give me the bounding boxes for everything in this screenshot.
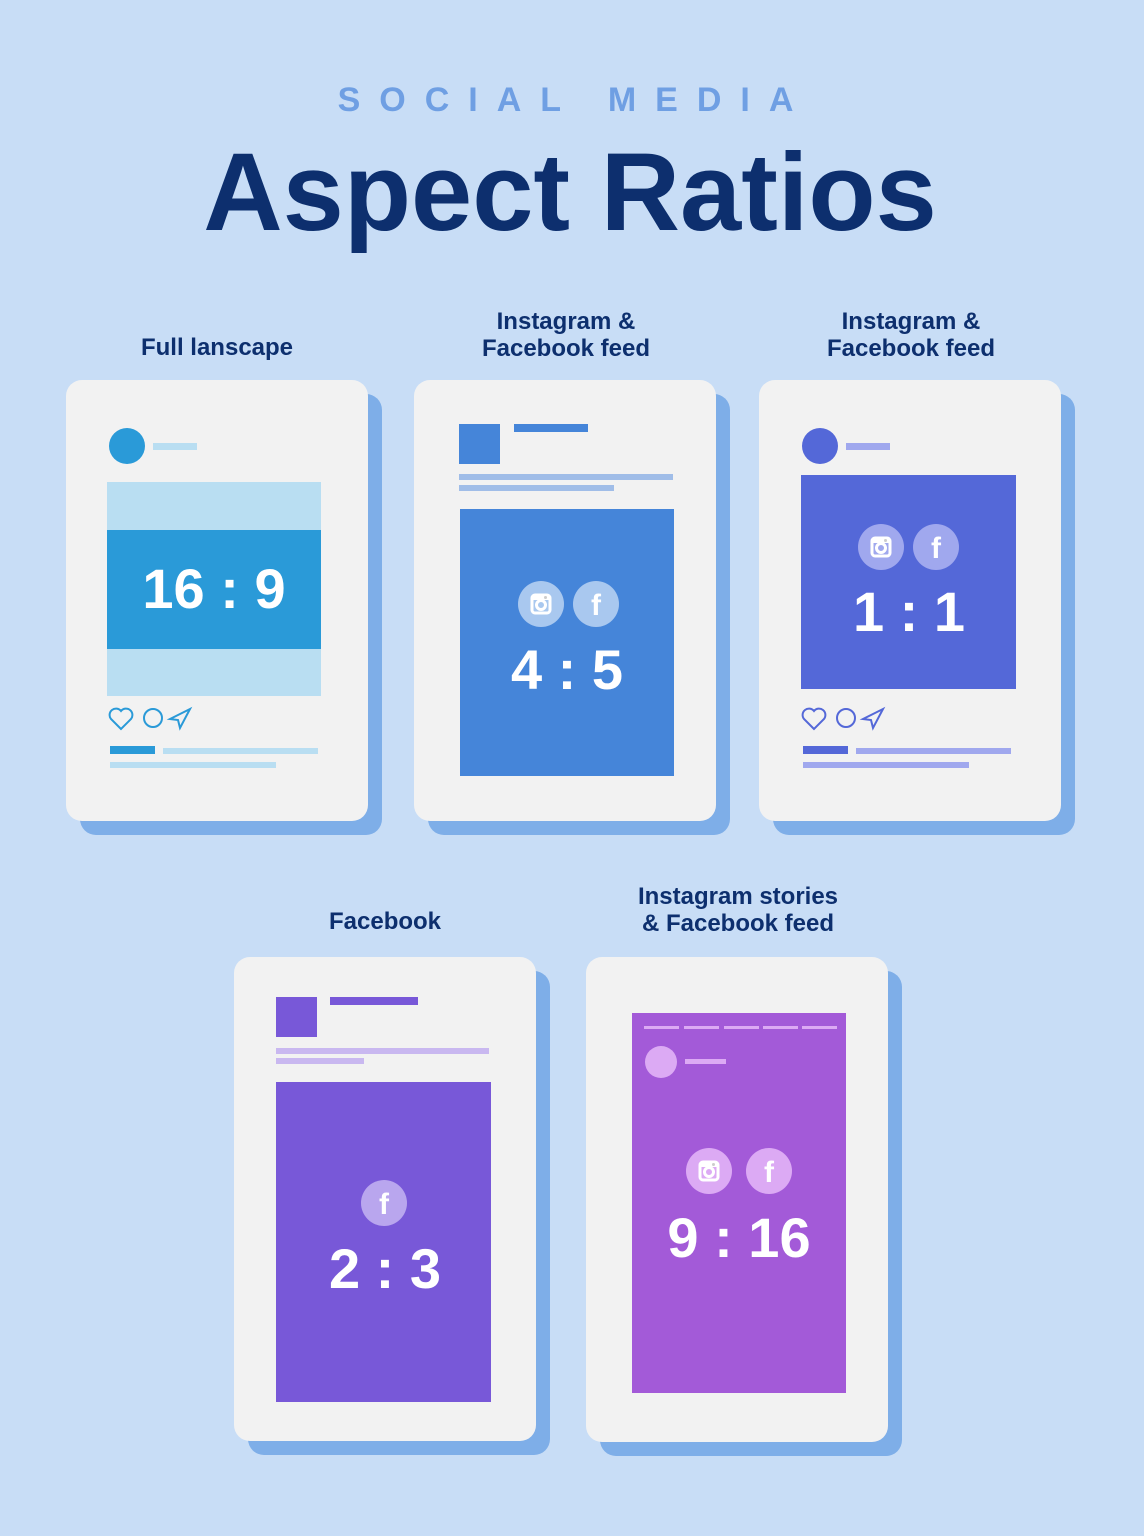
panel: 2:3 [234, 957, 550, 1455]
image 16:9 [107, 482, 321, 696]
label: facebook 2:3: Facebook [329, 908, 442, 935]
label: 4:5 [482, 308, 650, 362]
subtitle: SOCIAL MEDIA [338, 81, 812, 119]
label: stories 9:16: & Facebook feed [642, 910, 834, 937]
panel: 4:5: 4 : 5 [511, 638, 623, 701]
image 16:9: 16 : 9 [142, 557, 286, 620]
label: stories 9:16 [638, 883, 838, 937]
label: 1:1: Facebook feed [827, 335, 995, 362]
icons: like comment share [110, 709, 190, 729]
panel: 1:1 [759, 380, 1075, 835]
label: full landscape: Full lanscape [141, 334, 293, 361]
panel: 9:16 [586, 957, 902, 1456]
label: stories 9:16: Instagram stories [638, 883, 838, 910]
panel: 1:1: 1 : 1 [853, 580, 965, 643]
label: 1:1: Instagram & [842, 308, 980, 335]
panel: 4:5 [414, 380, 730, 835]
label: 4:5: Instagram & [497, 308, 635, 335]
panel: 2:3: 2 : 3 [329, 1237, 441, 1300]
panel: 16:9 [66, 380, 382, 835]
label: 1:1 [827, 308, 995, 362]
panel: 9:16: 9 : 16 [667, 1206, 811, 1269]
title: Aspect Ratios [203, 131, 937, 254]
label: 4:5: Facebook feed [482, 335, 650, 362]
